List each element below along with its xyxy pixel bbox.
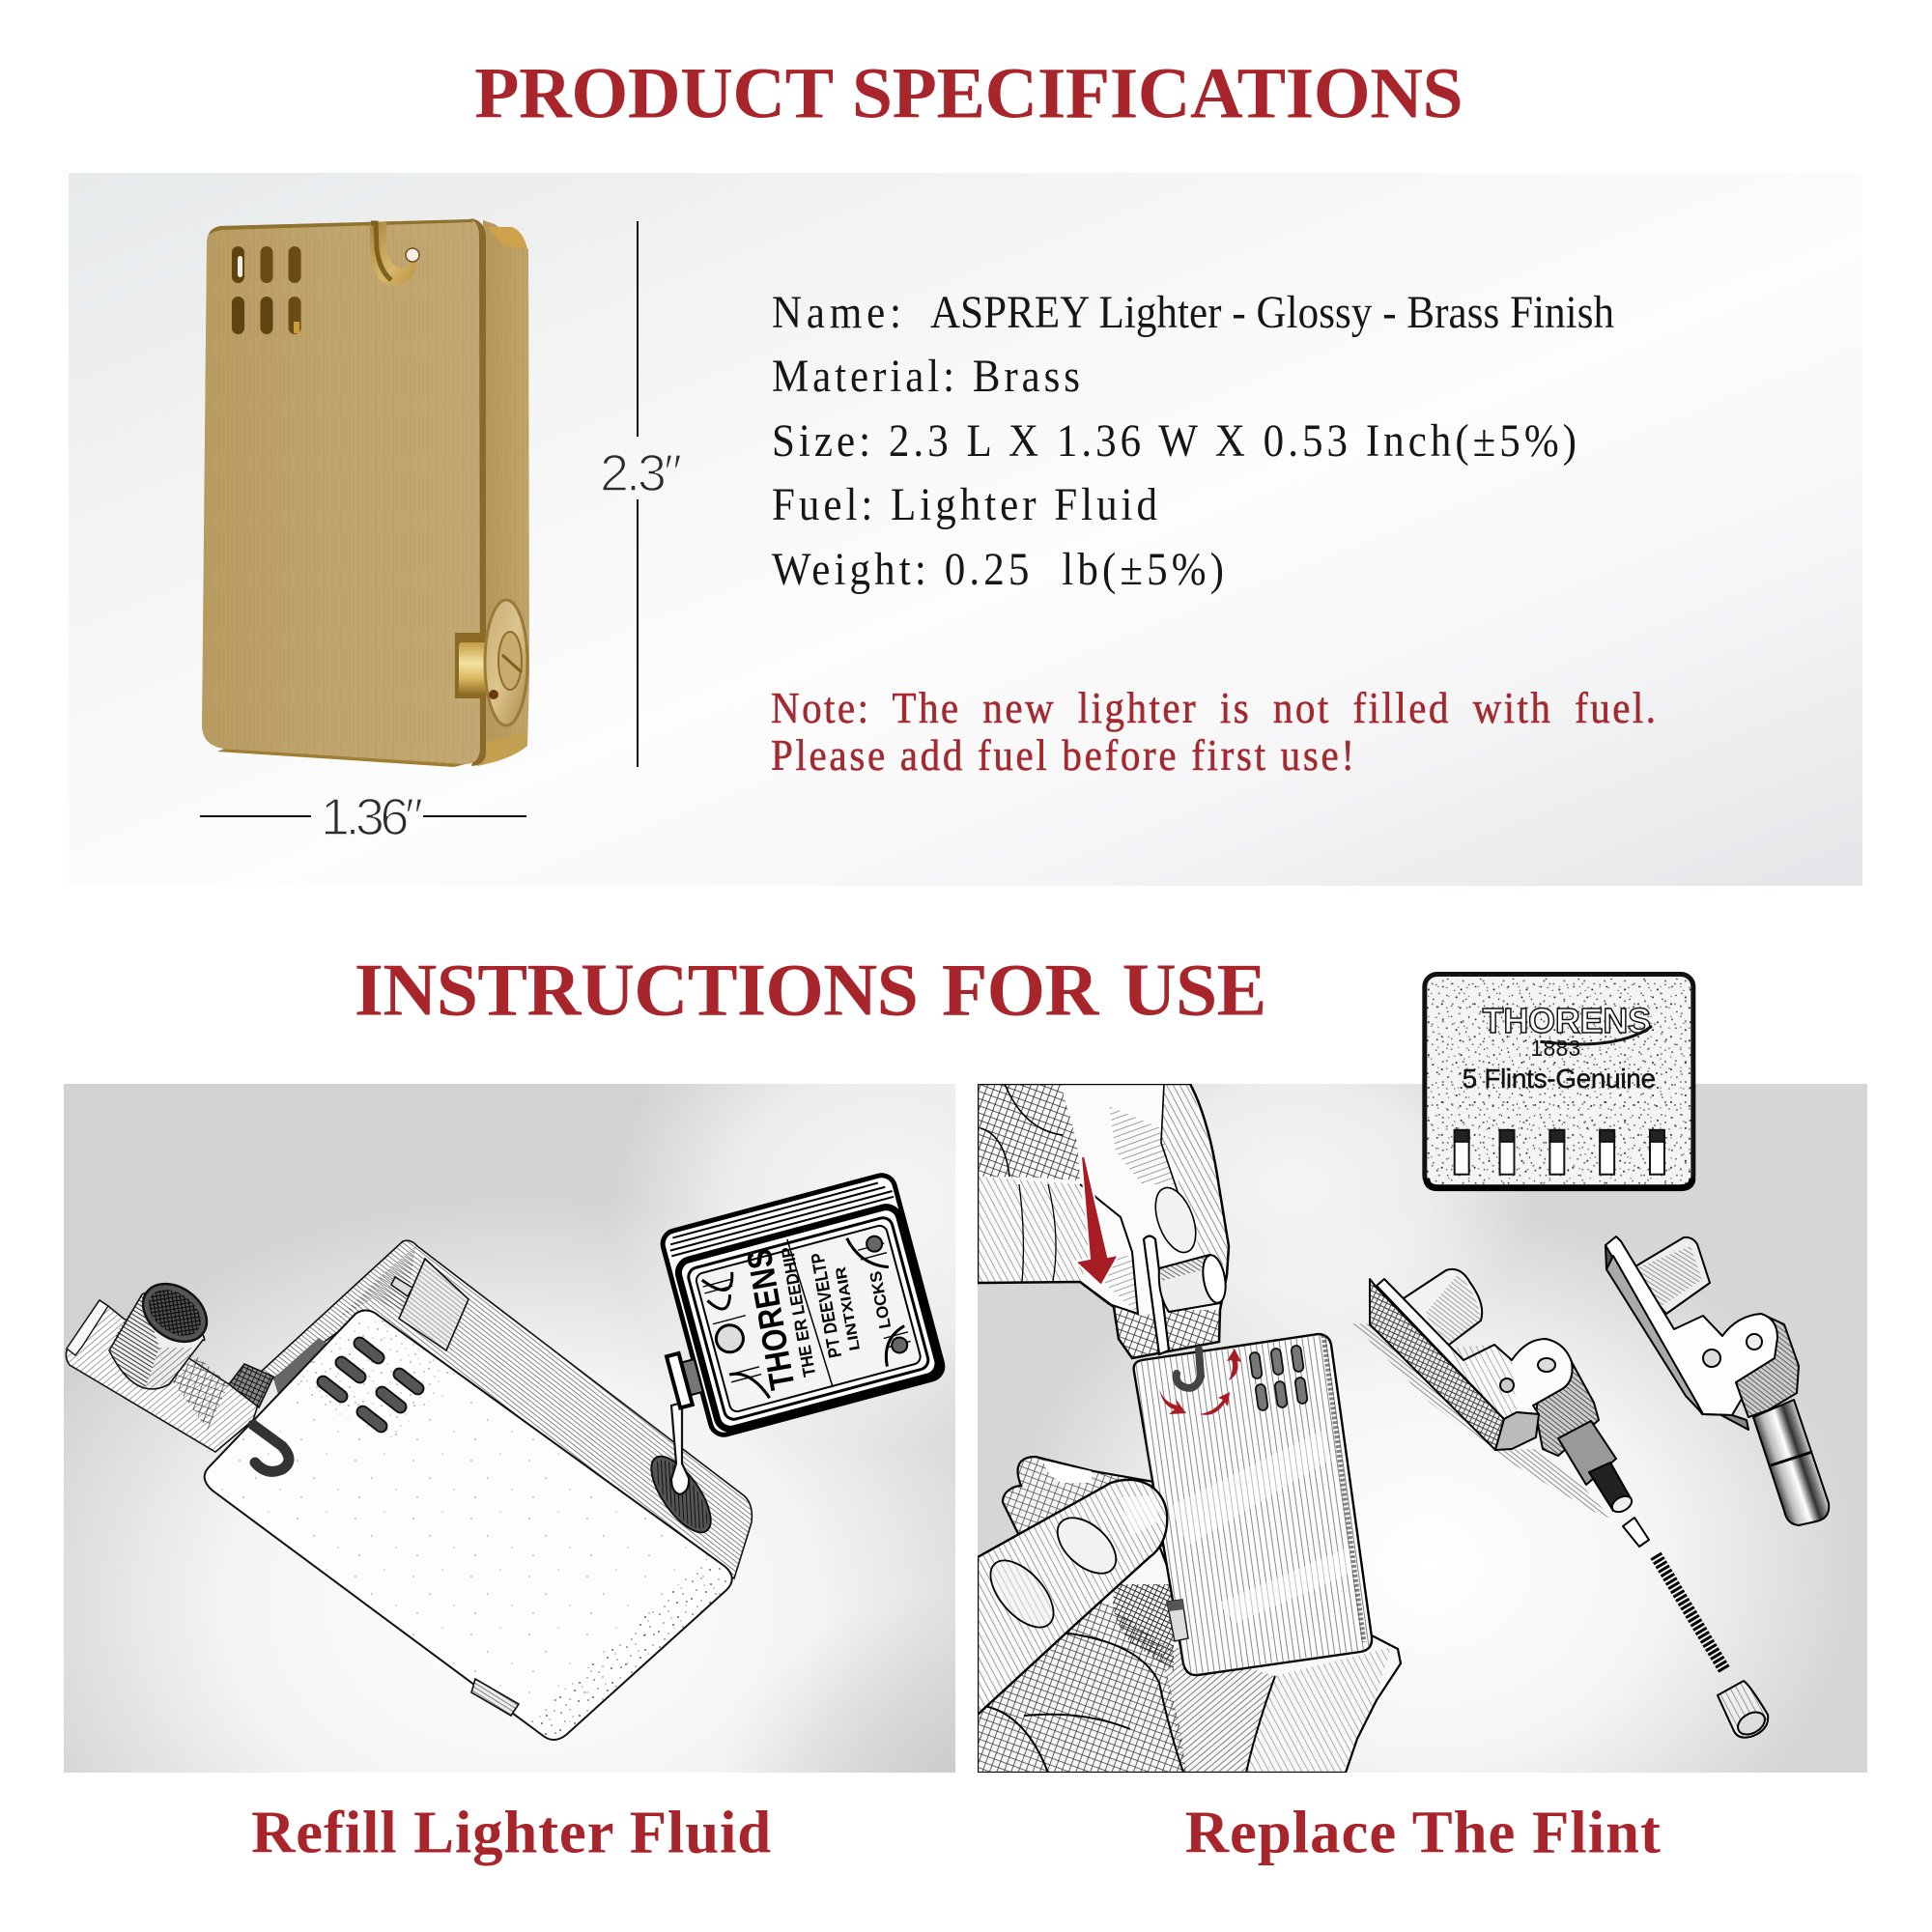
text block: specifications list: Name: (772, 286, 901, 338)
illustration: flint mechanism 2 (1605, 1236, 1829, 1525)
icons: flint windows (1455, 1130, 1664, 1175)
icon: red curved arrow 1 (1159, 1389, 1186, 1414)
text block: specifications list: ASPREY Lighter - Glossy - Brass Finish (930, 286, 1614, 338)
illustration: lower hand palm (978, 1546, 1401, 1773)
photo: brass lighter (202, 218, 529, 767)
caption: refill lighter fluid: Refill Lighter Fluid (251, 1798, 771, 1865)
text: flint count: 5 Flints-Genuine (1463, 1064, 1656, 1094)
illustration: thumb (978, 1480, 1167, 1715)
illustration: upper hand (978, 1084, 1229, 1358)
illustration: fuel tin: PT DEEVELTP (808, 1251, 846, 1359)
brand: THORENS: THORENS (1483, 1002, 1651, 1040)
dimension: height 2.3 inch: 2.3″ (600, 444, 682, 502)
illustration: back finger (1003, 1457, 1174, 1546)
illustration: hands holding lighter (978, 1084, 1401, 1773)
caption: replace the flint: Replace The Flint (1185, 1798, 1661, 1865)
illustration: lighter front face (205, 1310, 732, 1740)
title: product specifications: PRODUCT SPECIFICATIONS (474, 54, 1463, 134)
icon: red curved arrow 2 (1200, 1392, 1230, 1415)
icon: vent slots (1249, 1345, 1308, 1411)
heading: instructions for use: INSTRUCTIONS FOR USE (355, 948, 1266, 1031)
panel: specifications (69, 173, 1862, 886)
icon: red curved arrow 3 (1227, 1349, 1241, 1380)
icon: flint wheel slot (471, 1679, 519, 1716)
illustration: fuel tin (661, 1173, 945, 1437)
illustration: fuel tin: THE ER LEEDHIP (778, 1245, 819, 1378)
text block: specifications list: Fuel: Lighter Fluid (772, 478, 1157, 530)
illustration: flint packet card (1425, 974, 1693, 1188)
panel: refill lighter fluid (64, 1084, 955, 1773)
text block: specifications list: Size: 2.3 L X 1.36 W X 0.53 Inch(±5%) (772, 414, 1577, 467)
illustration: flip arm with chimney (66, 1272, 333, 1452)
dimension: width 1.36 inch: 1.36″ (321, 788, 423, 846)
illustration: fuel tin: LINTXIAIR (833, 1265, 864, 1352)
note: fuel warning (771, 685, 1656, 780)
icon: red down arrow (1075, 1156, 1119, 1286)
mark: brand swoosh (1540, 1026, 1652, 1044)
text block: specifications list (772, 286, 1614, 595)
illustration: fuel tin: LOCKS (867, 1269, 895, 1330)
illustration: lighter body side (261, 1240, 752, 1578)
illustration: lighter in hand (1134, 1334, 1372, 1675)
icon: hook slot (1177, 1350, 1201, 1388)
text: year: 1883 (1530, 1036, 1580, 1061)
note: fuel warning: Please add fuel before first use! (771, 732, 1354, 780)
note: fuel warning: Note: The new lighter is not filled with fuel. (771, 685, 1656, 732)
icon: vent slots (315, 1335, 426, 1435)
icon: hook slot (253, 1425, 289, 1471)
illustration: fuel hole with wick (650, 1403, 712, 1534)
panel: replace the flint (978, 972, 1867, 1773)
icon: flint wheel (485, 600, 527, 725)
text block: specifications list: Material: Brass (772, 350, 1080, 402)
illustration: flip arm and chimney (1144, 1236, 1229, 1354)
icon: small wheel (1167, 1600, 1188, 1641)
text block: specifications list: Weight: 0.25 lb(±5%) (772, 543, 1224, 595)
illustration: flint mechanism 1 (1352, 1269, 1769, 1739)
illustration: fuel tin: THORENS (739, 1246, 803, 1393)
